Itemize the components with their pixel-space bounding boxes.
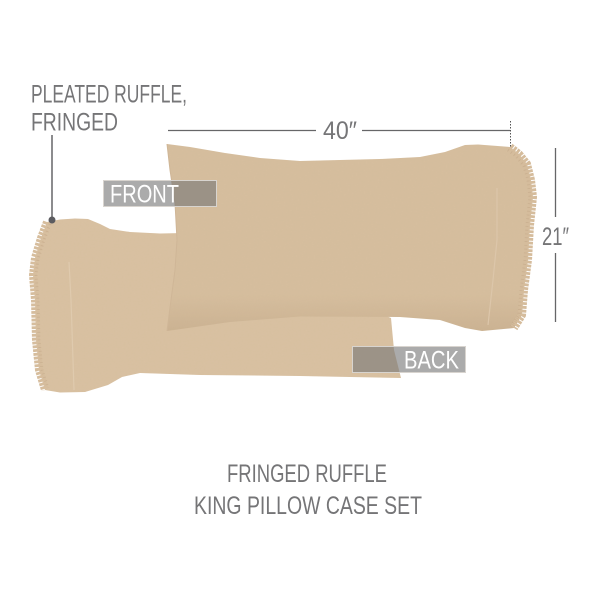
product title <box>194 460 422 520</box>
width dimension: 40 inches: 40″ <box>323 117 357 145</box>
callout: pleated ruffle: FRINGED <box>31 108 118 136</box>
back pillow <box>33 218 401 392</box>
product title: KING PILLOW CASE SET <box>194 492 422 520</box>
back label: BACK <box>404 346 459 374</box>
callout: pleated ruffle: PLEATED RUFFLE, <box>31 80 187 108</box>
back pillow fringe <box>33 222 47 390</box>
back label <box>352 346 466 374</box>
back pillow fringe ticks <box>36 224 50 388</box>
height dimension: 21 inches: 21″ <box>542 223 569 251</box>
back pillow hem crease <box>69 262 74 390</box>
front pillow hem crease <box>488 188 497 325</box>
front label: FRONT <box>110 180 179 208</box>
callout: pleated ruffle <box>31 80 187 224</box>
front pillow <box>167 144 533 331</box>
product title: FRINGED RUFFLE <box>227 460 387 488</box>
front pillow fringe ticks <box>508 150 530 326</box>
front pillow left edge <box>167 144 177 331</box>
front pillow fringe <box>510 147 533 328</box>
